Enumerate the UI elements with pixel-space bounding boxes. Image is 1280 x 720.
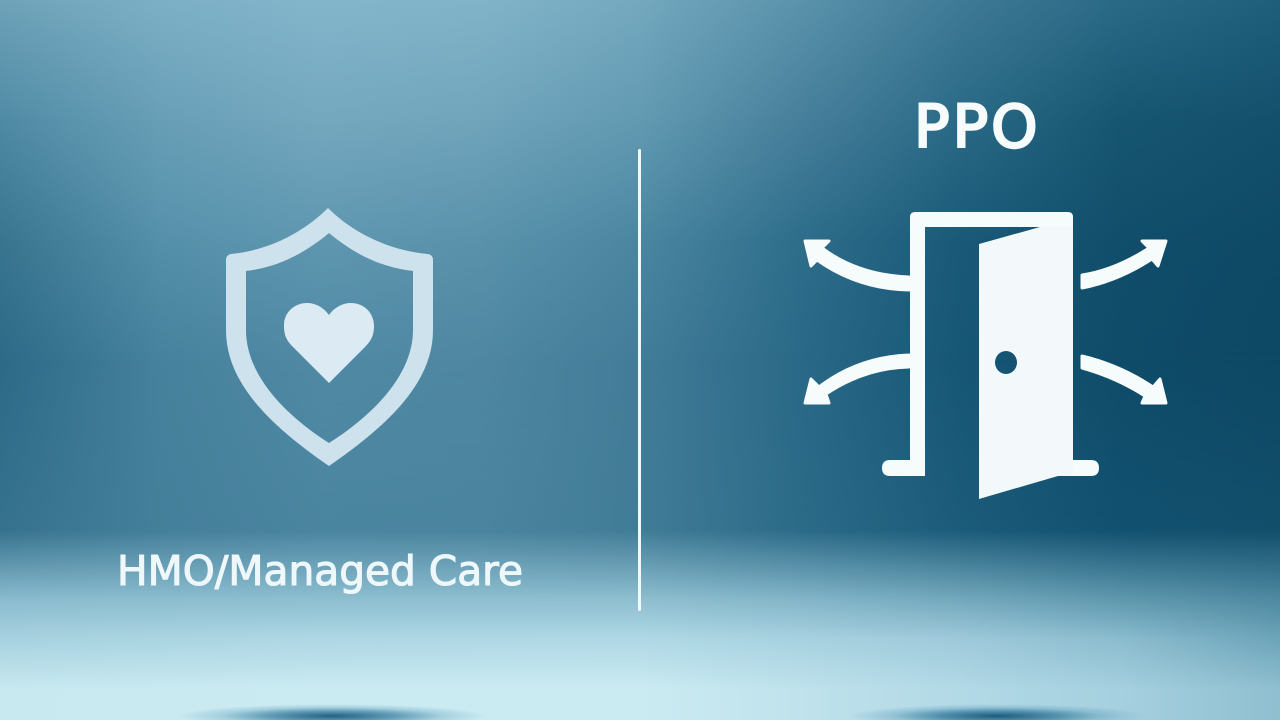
shield outline	[226, 208, 433, 466]
arrow: lower right	[1082, 356, 1166, 403]
heading: PPO: PPO	[914, 92, 1041, 161]
arrow: upper right	[1082, 241, 1166, 288]
arrow: upper left	[805, 241, 909, 290]
door panel	[979, 227, 1073, 499]
divider line	[638, 149, 641, 611]
heart	[284, 303, 374, 383]
heading: HMO/Managed Care: HMO/Managed Care	[117, 547, 523, 595]
door frame	[882, 212, 1099, 476]
arrow: lower left	[805, 355, 909, 403]
